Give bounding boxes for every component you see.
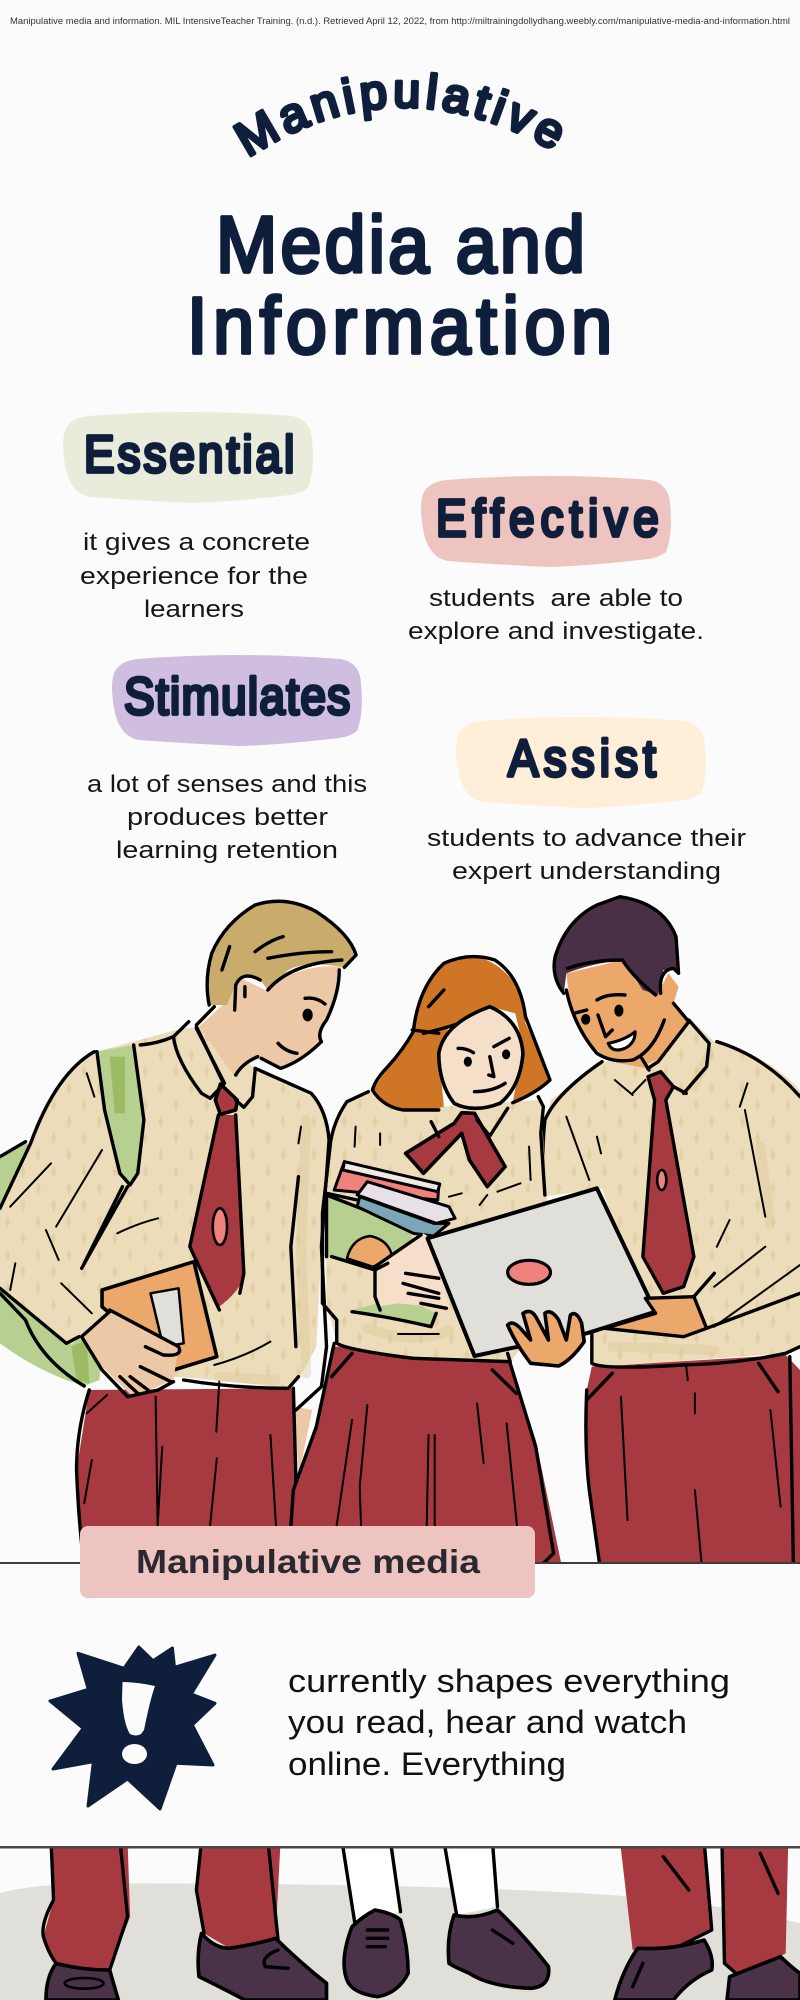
shirt [541, 1020, 800, 1367]
panel: essential [63, 412, 313, 623]
effective heading: Effective [436, 490, 659, 548]
stimulates heading: Stimulates [124, 668, 350, 726]
leg skin [295, 1407, 312, 1477]
legs and shoes [43, 1840, 800, 2000]
skirt [288, 1347, 561, 1563]
panel: assist [427, 717, 746, 885]
hands on laptop [508, 1273, 800, 1366]
student left [0, 901, 356, 1563]
hair [554, 897, 679, 995]
essential text: learners [144, 596, 244, 623]
books [327, 1162, 455, 1267]
stimulates text: learning retention [116, 837, 338, 864]
illustration: students [0, 897, 800, 2000]
panel: stimulates [87, 655, 367, 864]
student right [541, 897, 800, 1563]
trousers [587, 1355, 800, 1563]
assist text: students to advance their [427, 825, 746, 852]
effective badge [421, 476, 671, 567]
laptop [428, 1188, 656, 1356]
essential text: experience for the [80, 563, 308, 590]
effective text [408, 585, 704, 645]
panel text [288, 1663, 730, 1782]
floor [0, 1883, 800, 2000]
panel text: you read, hear and watch [288, 1704, 687, 1740]
essential text [80, 529, 310, 623]
title: line two: Information [187, 281, 612, 371]
collar [640, 1020, 709, 1093]
essential text: it gives a concrete [83, 529, 310, 556]
tie [643, 1072, 694, 1293]
student middle [288, 956, 561, 1563]
assist text [427, 825, 746, 885]
tie [190, 1115, 244, 1308]
stimulates text: a lot of senses and this [87, 771, 367, 798]
shirt [326, 1092, 551, 1362]
bottom rule [0, 1846, 800, 1848]
title: line one: Media and [216, 200, 585, 290]
stimulates text: produces better [127, 804, 328, 831]
citation: Manipulative media and information. MIL IntensiveTeacher Training. (n.d.). Retrieved April 12, 2022, from http://miltrainingdollydhang.weebly.com/manipulative-media-and-information.html [10, 16, 790, 26]
icon: exclamation burst [50, 1647, 215, 1809]
hair [372, 956, 550, 1111]
hair [207, 901, 356, 1005]
stimulates text [87, 771, 367, 864]
neck and face [566, 960, 689, 1070]
panel text: currently shapes everything [288, 1663, 730, 1699]
panel heading: Manipulative media [136, 1543, 481, 1580]
hand and book left [82, 1262, 217, 1397]
stimulates badge [112, 655, 362, 746]
ribbon [406, 1113, 505, 1187]
green book lower [352, 1297, 436, 1327]
assist heading: Assist [508, 730, 656, 788]
panel: manipulative media [0, 1526, 800, 1848]
hand left of laptop [372, 1233, 449, 1308]
collar [173, 1022, 255, 1107]
trousers [77, 1388, 296, 1563]
face [439, 1007, 523, 1108]
essential heading: Essential [84, 426, 294, 484]
laptop logo [508, 1260, 551, 1284]
essential badge [63, 412, 313, 503]
assist text: expert understanding [452, 858, 721, 885]
effective text: explore and investigate. [408, 618, 704, 645]
panel heading [80, 1526, 535, 1598]
assist badge [456, 717, 706, 808]
title: curved word: Manipulative [232, 72, 562, 158]
strap [97, 1045, 144, 1185]
panel: effective [408, 476, 704, 645]
panel text: online. Everything [288, 1746, 566, 1782]
title [187, 72, 612, 371]
neck and face [199, 966, 341, 1077]
effective text: students are able to [429, 585, 683, 612]
shirt [0, 1027, 331, 1388]
backpack [0, 1142, 107, 1386]
face details [614, 1005, 623, 1017]
face details [303, 1009, 313, 1021]
top rule [0, 1562, 800, 1564]
